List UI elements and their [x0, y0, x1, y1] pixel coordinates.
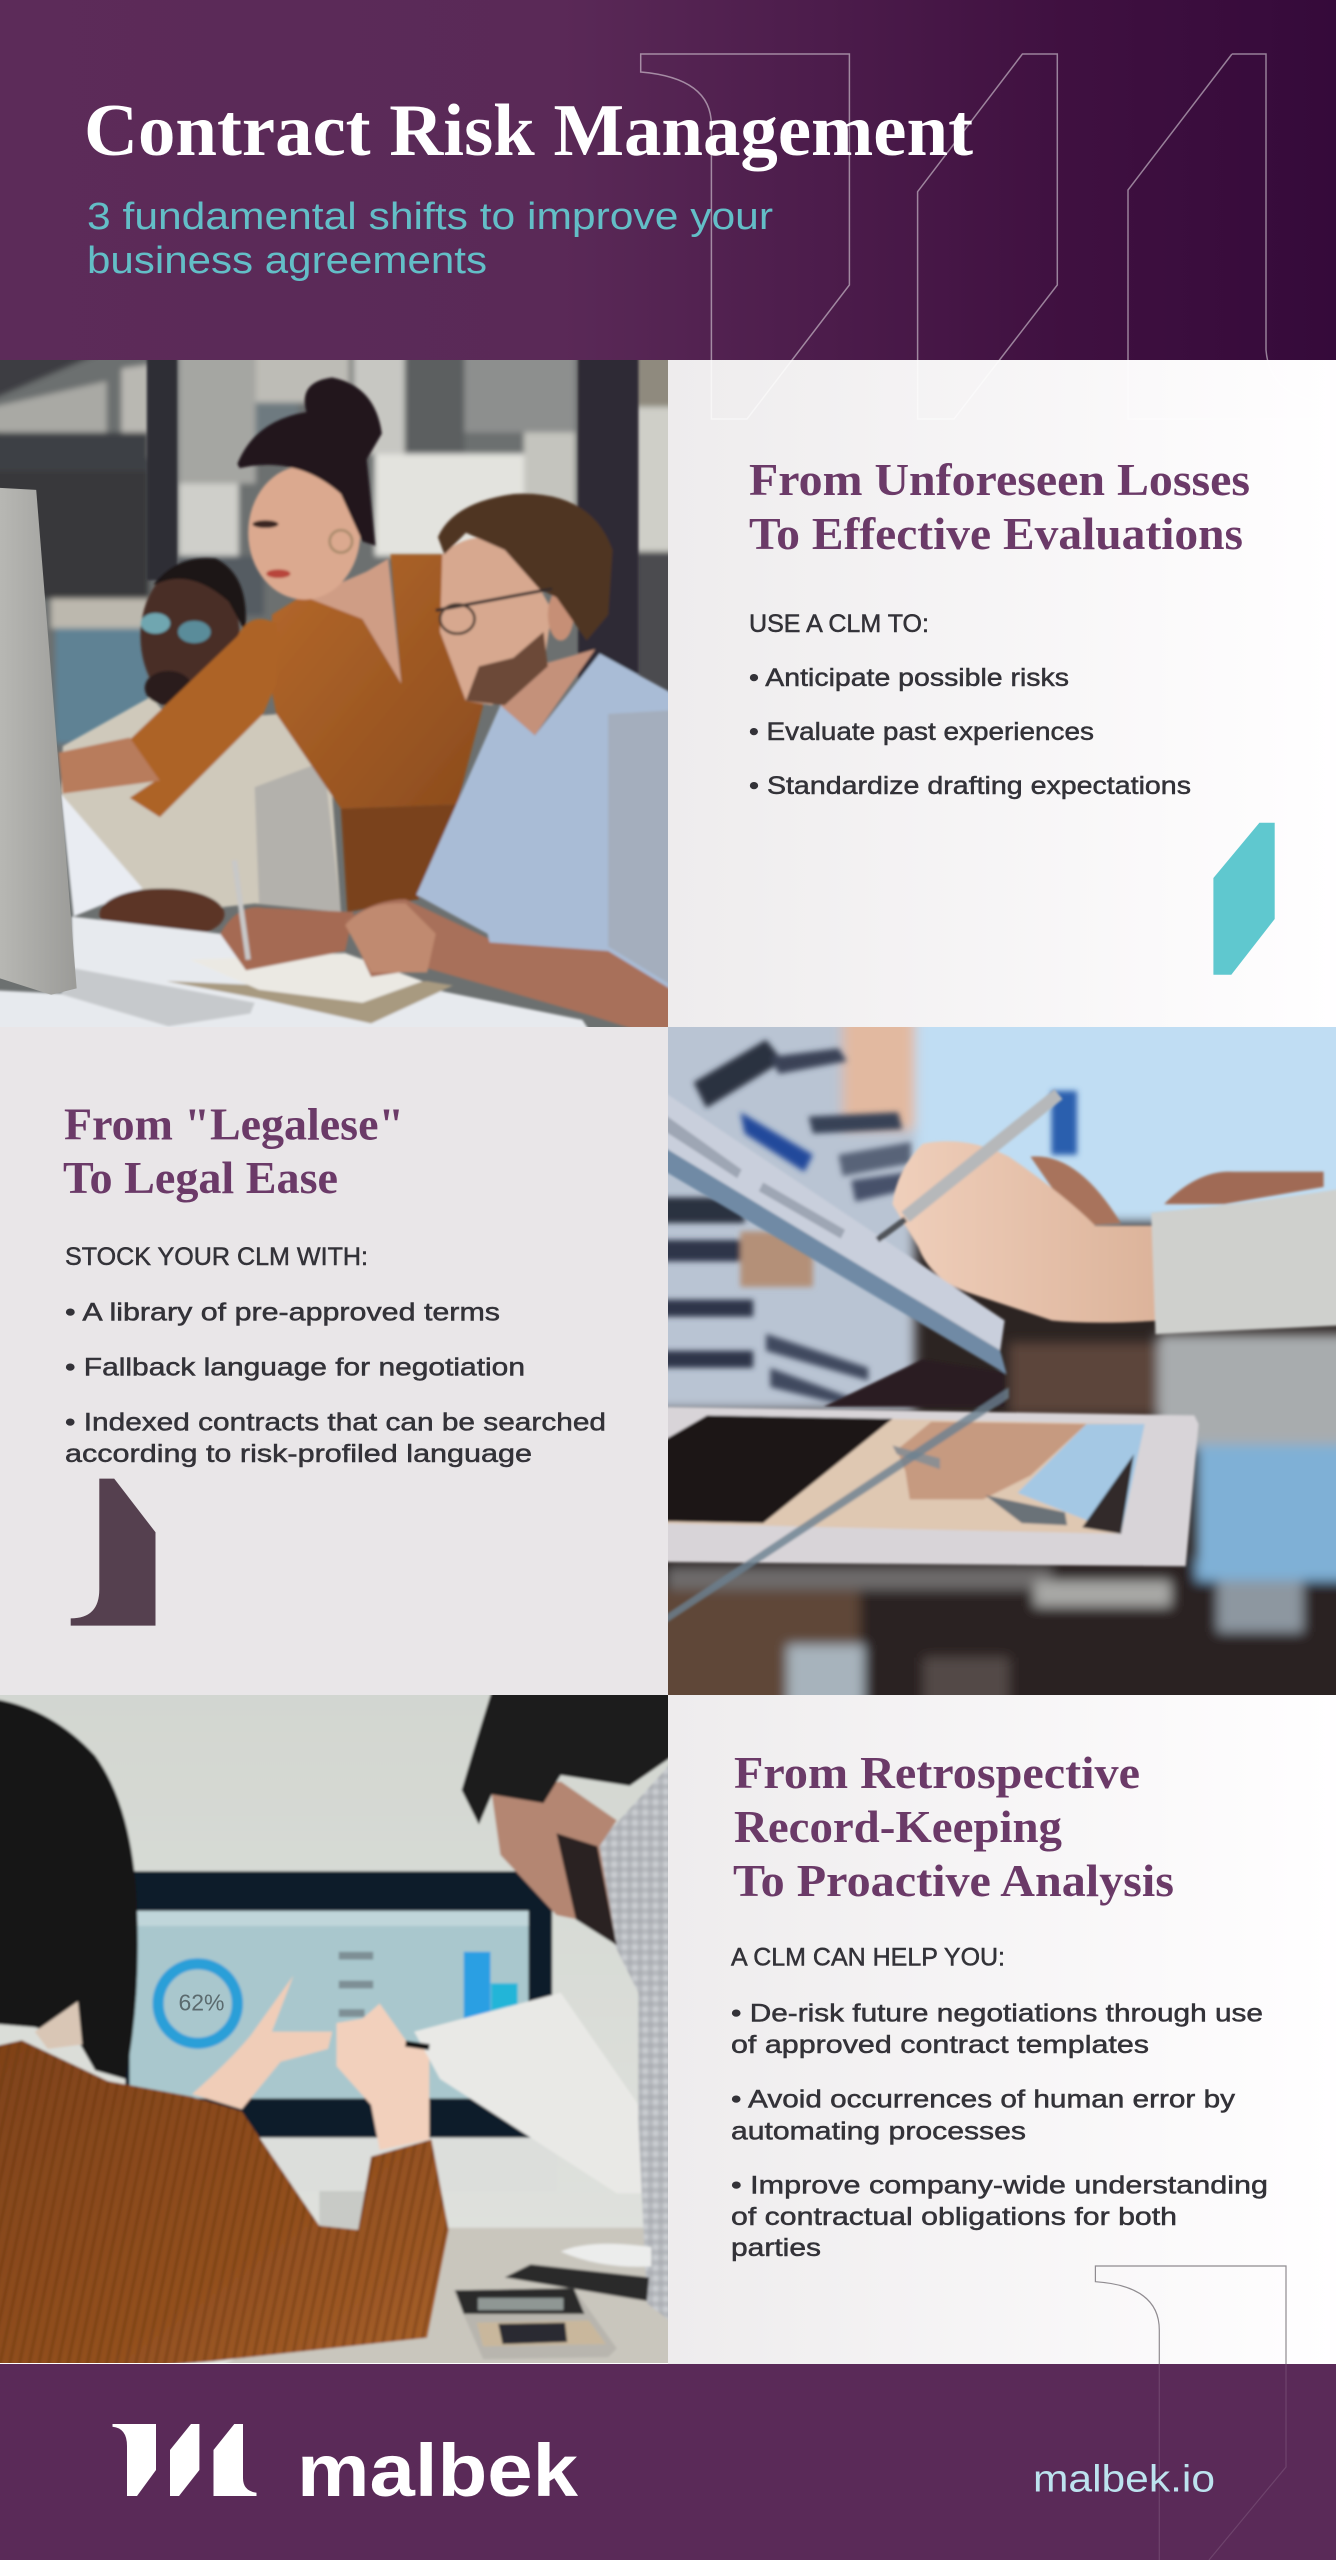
paper	[414, 1993, 643, 2193]
striped sweater	[694, 1040, 783, 1108]
icon: teal logo shape	[1213, 823, 1275, 975]
hands	[192, 1976, 332, 2109]
computer monitor	[0, 488, 77, 995]
heading: From "Legalese"	[64, 1098, 404, 1150]
bullet list: of contractual obligations for both	[731, 2203, 1177, 2231]
bullet list	[65, 1243, 606, 1468]
header banner	[0, 0, 1336, 360]
bullet list: • Fallback language for negotiation	[65, 1354, 525, 1382]
logo: malbek	[112, 2424, 579, 2512]
bullet list: of approved contract templates	[731, 2031, 1149, 2059]
pen	[877, 1219, 905, 1240]
bullet list: • Avoid occurrences of human error by	[731, 2085, 1236, 2113]
photo: hand signing a document over a tablet	[668, 1027, 1336, 1695]
man on the left	[61, 697, 341, 912]
bullet list: USE A CLM TO:	[749, 610, 929, 638]
heading: From Unforeseen Losses	[749, 454, 1250, 505]
footer band	[0, 2364, 1336, 2560]
bullet list: • Indexed contracts that can be searched	[65, 1408, 606, 1436]
bullet list: A CLM CAN HELP YOU:	[731, 1944, 1005, 1972]
heading	[749, 454, 1250, 559]
subtitle: 3 fundamental shifts to improve your	[87, 196, 773, 238]
website url: malbek.io	[1033, 2459, 1215, 2501]
hand with pen	[220, 907, 354, 970]
bullet list: • Anticipate possible risks	[749, 664, 1069, 692]
heading	[733, 1747, 1174, 1906]
hand and sleeve	[892, 1141, 1160, 1323]
panel: proactive analysis	[668, 1695, 1336, 2364]
heading: To Effective Evaluations	[749, 508, 1243, 559]
bullet list: parties	[731, 2234, 821, 2262]
subtitle	[87, 196, 773, 282]
heading: To Legal Ease	[63, 1152, 338, 1203]
title: Contract Risk Management	[84, 90, 973, 172]
photo: three colleagues at a computer	[0, 360, 668, 1027]
dark table reflection	[824, 1359, 1005, 1407]
icon: dark logo shape	[71, 1479, 156, 1626]
heading: To Proactive Analysis	[733, 1855, 1174, 1906]
bullet list: according to risk-profiled language	[65, 1440, 532, 1468]
subtitle: business agreements	[87, 240, 487, 282]
clipboard	[651, 1083, 1005, 1351]
photo: two people reviewing a dashboard	[0, 1678, 686, 2381]
outline logo: lower right	[1095, 2266, 1286, 2560]
sweater	[0, 2040, 449, 2381]
bullet list: • A library of pre-approved terms	[65, 1298, 500, 1326]
bullet list	[749, 610, 1191, 800]
heading: Record-Keeping	[734, 1801, 1062, 1852]
bullet list: STOCK YOUR CLM WITH:	[65, 1243, 368, 1271]
bullet list: • Evaluate past experiences	[749, 718, 1094, 746]
icon: logo mark	[112, 2424, 256, 2496]
heading: From Retrospective	[734, 1747, 1140, 1798]
woman	[341, 804, 457, 912]
heading	[63, 1098, 404, 1203]
tablet	[651, 1407, 1199, 1566]
bullet list: • De-risk future negotiations through use	[731, 1999, 1263, 2027]
bullet list: • Standardize drafting expectations	[749, 772, 1191, 800]
bullet list	[731, 1944, 1268, 2262]
outline logo: header	[641, 54, 1336, 419]
panel: legalese	[0, 1027, 668, 1695]
bullet list: • Improve company-wide understanding	[731, 2172, 1268, 2200]
bullet list: automating processes	[731, 2117, 1026, 2145]
man on the right	[352, 898, 668, 1027]
man	[598, 1766, 668, 2318]
panel: unforeseen losses	[668, 360, 1336, 1027]
desk items	[561, 2244, 651, 2267]
wordmark: malbek	[297, 2429, 579, 2512]
dashboard donut value: 62%	[178, 1990, 225, 2016]
desk	[0, 916, 600, 1046]
hair of the woman	[0, 1697, 138, 2079]
